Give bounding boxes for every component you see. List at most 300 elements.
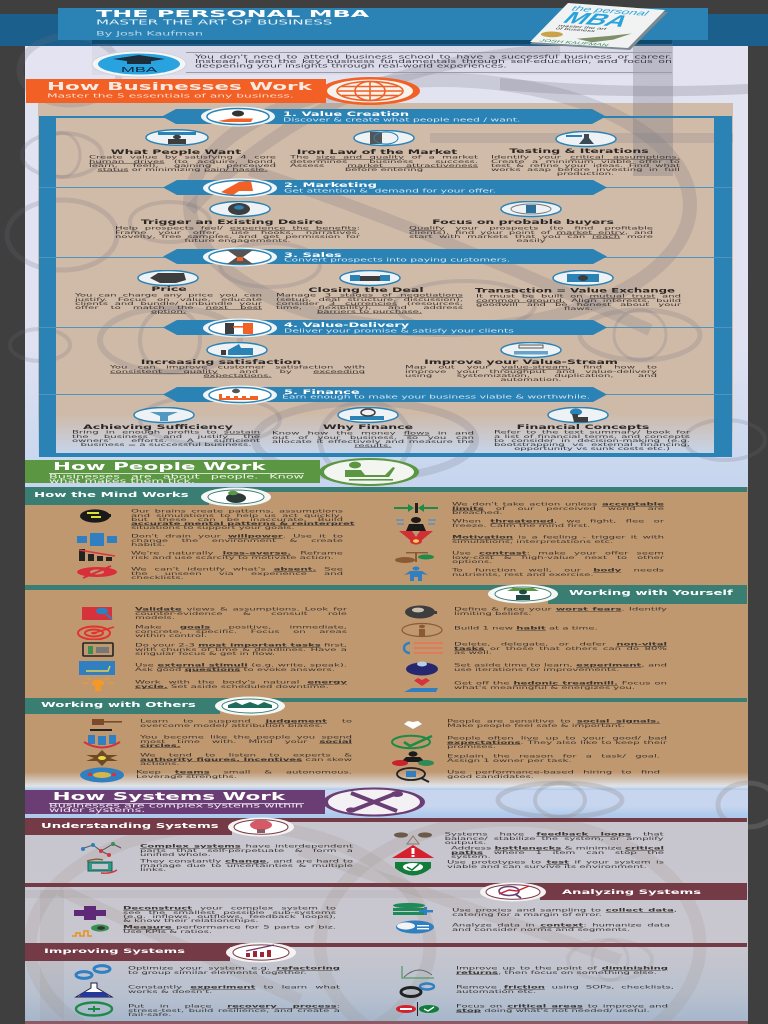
text: contrast: options. — [452, 559, 492, 564]
text: hiring: good candidates. — [447, 774, 534, 779]
text: experiment: Set aside time to learn, experiment, and — [454, 663, 667, 668]
icon: white heart — [391, 717, 435, 733]
intro text — [195, 54, 672, 69]
card: Iron Law of the Market: The size and quality of a market — [290, 155, 478, 160]
icon: person with tags — [391, 751, 435, 767]
card: Achieving Sufficiency: Bring in enough profits to sustain — [72, 430, 260, 435]
card: Increasing satisfaction: consistent quality and by exceeding — [110, 369, 365, 374]
ribbon: Sales — [163, 248, 607, 266]
text: absent: the unseen via experience and — [131, 571, 343, 576]
card: Testing & Iterations: Testing & Iterations — [509, 147, 649, 155]
heading banner: How Systems Work: How Systems Work — [53, 791, 285, 803]
text: feedback loops: balance/ stabilize the system, or amplify — [445, 836, 664, 841]
text: hedonic treadmill: what's meaningful & energizes you. — [454, 685, 635, 690]
text: measure — [123, 926, 336, 934]
card: Why Finance: allocate it effectively and measure the — [272, 439, 474, 444]
text: contrast — [452, 552, 664, 564]
icon: navy pig — [400, 660, 444, 676]
card: Testing & Iterations: works asap before investing in full — [491, 167, 680, 172]
panel: Working with Yourself — [25, 585, 748, 698]
card: Focus on probable buyers: Qualify your prospects (to find profitable — [409, 226, 653, 231]
card: Achieving Sufficiency: business = a successful business. — [81, 442, 251, 447]
icon: book cover: master the art — [557, 24, 608, 31]
card: Achieving Sufficiency: Achieving Sufficiency — [83, 423, 233, 430]
card: Achieving Sufficiency: owners' efforts. A sufficient — [72, 438, 260, 443]
card: Focus on probable buyers: easily — [516, 238, 546, 243]
watermark: systems — [25, 818, 748, 1024]
text: test: Use prototypes to test if your system is — [447, 860, 664, 865]
icon: network — [79, 841, 123, 857]
card: Achieving Sufficiency — [72, 407, 260, 447]
text: non-vital tasks: tasks or those that others can do 80% — [454, 646, 667, 651]
text: non-vital tasks: Delete, delegate, or defer non-vital — [454, 642, 667, 647]
icon: delete list — [400, 640, 444, 656]
text: experiment: use iterations for improvements. — [454, 667, 619, 672]
card: Transaction = Value Exchange — [475, 270, 681, 311]
panel: Improving Systems — [25, 943, 748, 1024]
card: Why Finance: results. — [354, 443, 392, 448]
text: brains: situations to support your goals. — [131, 525, 295, 530]
text: recovery process: fail-safe. — [128, 1012, 171, 1017]
intro rule lines — [186, 52, 672, 73]
text: goals: within control. — [135, 633, 207, 638]
ribbon: Value Creation: Discover & create what people need / want. — [283, 117, 520, 123]
text: deconstruct: see the smallest possible sub-systems — [123, 910, 336, 915]
card: Trigger an Existing Desire: novelty, free samples, and get permission for — [115, 234, 360, 239]
text: judgement: overcome model/ attribution biases. — [140, 723, 323, 728]
icon: dark head — [400, 604, 444, 620]
icon: blue bubble — [391, 920, 435, 936]
heading banner: How People Work: what makes them tick. — [49, 477, 195, 484]
icon: globe — [326, 77, 420, 105]
text: social signals: Make people feel safe & important. — [447, 723, 625, 728]
card: Financial Concepts: Financial Concepts — [517, 423, 649, 430]
card: Price: You can charge any price you can — [75, 293, 262, 298]
card: What People Want: learn, feel), gaining perceived — [89, 163, 276, 168]
heading banner: How Businesses Work: Master the 5 essentials of any business. — [47, 93, 294, 99]
card: Transaction = Value Exchange: common ground. Align interests, build — [476, 298, 681, 303]
ribbon: Value-Delivery: 4. Value-Delivery — [284, 322, 409, 329]
card: Trigger an Existing Desire: Frame your offer, use hooks, narratives, — [115, 230, 360, 235]
card: Financial Concepts: bootstrapping vs external financing, — [494, 442, 690, 447]
icon: change cycle — [79, 858, 123, 874]
card: Focus on probable buyers — [409, 201, 653, 243]
header panel — [58, 8, 708, 44]
card: Financial Concepts: Refer to the text summary/ book for — [494, 430, 690, 435]
heading banner: How People Work — [25, 458, 419, 486]
card: Price: offer to match the next best — [75, 305, 262, 310]
heading banner: How Businesses Work — [26, 77, 420, 105]
card: What People Want: Create value by satisfying 4 core — [89, 155, 276, 160]
icon: medal — [394, 530, 438, 546]
text: friction: Remove friction using SOPs, checklists, — [456, 985, 674, 990]
heading: Working with Others: Working with Others — [41, 701, 196, 709]
text: friction: automation etc. — [456, 989, 536, 994]
icon: orange bulb — [76, 676, 120, 692]
ribbon: Value Creation — [163, 106, 605, 126]
card: Testing & Iterations: Create a minimum viable offer to — [491, 159, 680, 164]
text: complex systems: parts that self-perpetuate & form a — [140, 848, 353, 853]
card: Financial Concepts: opportunity vs sunk costs etc.) — [514, 446, 670, 451]
card: Closing the Deal: barriers to purchase. — [317, 309, 422, 314]
heading banner: How People Work: Businesses are about people. Know — [49, 473, 304, 480]
text: motivation: Motivation is a feeling - trigger it with — [452, 535, 664, 540]
heading banner: How Systems Work — [25, 787, 425, 817]
ribbon: Value-Delivery — [163, 318, 607, 338]
card: Testing & Iterations — [491, 131, 680, 176]
text: absent: checklists. — [131, 575, 184, 580]
icon: people circle — [80, 733, 124, 749]
icon: book cover: JOSH KAUFMAN — [538, 38, 610, 47]
card: Improve your Value-Stream: Map out your value-stream, find how to — [405, 365, 657, 370]
author: By Josh Kaufman — [96, 30, 203, 37]
icon: head — [80, 509, 111, 523]
text: brains: but these can be inaccurate. Build — [131, 517, 343, 522]
ribbon: Marketing: 2. Marketing — [284, 182, 377, 189]
text: important tasks: singular focus & get in flow. — [135, 651, 275, 656]
card: Closing the Deal: consider 3 currencies (resources, — [276, 301, 463, 306]
card: Trigger an Existing Desire: future engagements. — [184, 238, 291, 243]
text: absent — [131, 567, 343, 580]
card: Improve your Value-Stream: automation. — [500, 377, 562, 382]
text: brains: and simulations to help us act quickly, — [131, 513, 343, 518]
intro text: deepening your insights through real-world experiences. — [195, 63, 507, 69]
card: Increasing satisfaction: You can improve customer satisfaction with — [110, 365, 365, 370]
text: non-vital tasks — [454, 643, 667, 655]
text: limits — [452, 502, 664, 515]
text: energy cycle — [135, 681, 347, 689]
text: willpower: habits. — [131, 542, 165, 547]
text: judgement — [140, 720, 352, 728]
panel: How the Mind Works — [25, 487, 748, 585]
card: Focus on probable buyers: start with markets that you can reach more — [409, 234, 653, 239]
text: refactoring: Optimize your system e.g. refactoring — [128, 966, 340, 971]
text: body: To function well, our body needs — [452, 568, 664, 573]
ribbon: Finance — [163, 386, 607, 404]
text: experiment: Constantly experiment to learn what — [128, 985, 340, 990]
text: context — [452, 924, 670, 932]
text: diminishing returns: returns, then focus on something else. — [456, 970, 657, 975]
text: complex systems: unified whole. — [140, 852, 211, 857]
text: absent: We can't identify what's absent. See — [131, 567, 343, 572]
card: Price: option. — [151, 309, 186, 314]
card: Achieving Sufficiency: the business and justify the — [72, 434, 260, 439]
text: worst fears — [454, 608, 667, 616]
heading banner: How Systems Work: Businesses are complex systems within — [49, 803, 303, 810]
icon: book cover: MBA — [558, 8, 636, 30]
text: authority figures: We tend to listen to experts & — [140, 753, 352, 758]
text: limits: limits of our perceived world are — [452, 506, 664, 511]
text: important tasks: with chunks of time & deadlines. Have a — [135, 647, 347, 652]
text: change: They constantly change, and are hard to — [140, 859, 353, 864]
text: hiring — [447, 771, 660, 779]
intro text: Instead, learn the key business fundamentals through self-education, and focus on — [195, 59, 672, 65]
text: critical areas: Focus on critical areas to improve and — [456, 1004, 668, 1009]
text: willpower — [131, 534, 343, 547]
icon: clipboard — [76, 641, 120, 657]
card: Iron Law of the Market — [290, 130, 478, 172]
text: teams — [136, 771, 352, 779]
text: critical areas — [456, 1005, 668, 1013]
card: Testing & Iterations: test & refine your ideas. Find what — [491, 163, 680, 168]
icon: target — [76, 624, 120, 640]
text: expectations: People often live up to your good/ bad — [447, 736, 667, 741]
text: threatened: freeze. Calm the mind first. — [452, 523, 590, 528]
card: Focus on probable buyers: Focus on probable buyers — [432, 218, 614, 226]
text: deconstruct: Deconstruct your complex system to — [123, 906, 336, 911]
card: Improve your Value-Stream: improve your throughput and value-delivery — [405, 369, 657, 374]
text: change: manage due to uncertainties & multiple — [140, 863, 353, 868]
icon: balance — [391, 830, 435, 846]
text: worst fears: Define & face your worst fears. Identify — [454, 607, 667, 612]
text: important tasks — [135, 644, 347, 656]
text: judgement: Learn to suspend judgement to — [140, 719, 352, 724]
text: motivation: simulations, interpretations etc. — [452, 539, 613, 544]
card: Transaction = Value Exchange: flaws. — [564, 306, 593, 311]
icon: folder and magnifier — [76, 605, 120, 621]
ribbon: Sales: 3. Sales — [284, 251, 342, 258]
card: Trigger an Existing Desire — [115, 201, 360, 243]
icon: magnifier person — [391, 767, 435, 783]
icon: green check — [391, 734, 435, 750]
text: measure: Measure performance for 5 parts of biz. — [123, 925, 336, 930]
icon: sheriff star — [80, 750, 124, 766]
text: diminishing returns: Improve up to the point of diminishing — [456, 966, 668, 971]
ribbon: Sales: Convert prospects into paying customers. — [284, 257, 510, 263]
card: Why Finance: out of your business, so you can — [272, 435, 474, 440]
text: reason: Assign 1 owner per task. — [447, 758, 572, 763]
text: diminishing returns — [456, 967, 668, 975]
text: goals: Make goals positive, immediate, — [135, 625, 347, 630]
text: important tasks: Do your 2-3 most important tasks first, — [135, 643, 347, 648]
icon: green shield — [391, 860, 435, 876]
text: expectations: expectations. They also like to keep their — [447, 740, 667, 745]
text: validate: models. — [135, 615, 175, 620]
text: goals: concrete, specific. Focus on areas — [135, 629, 347, 634]
text: teams: Leverage strengths. — [136, 774, 237, 779]
card: Closing the Deal — [276, 270, 463, 314]
text: feedback loops — [445, 833, 664, 845]
icon: heart in hand — [400, 677, 444, 693]
text: authority figures — [140, 754, 352, 766]
card: Increasing satisfaction: expectations. — [203, 373, 272, 378]
text: willpower: Don't drain your willpower. Use it to — [131, 534, 343, 539]
text: expectations: promises. — [447, 744, 496, 749]
card: Transaction = Value Exchange: Transaction = Value Exchange — [475, 287, 675, 294]
heading: Analyzing Systems: Analyzing Systems — [562, 888, 701, 896]
text: deconstruct: (e.g. inflows, outflows, feedback loops), — [123, 914, 336, 919]
card: Transaction = Value Exchange: goodwill and be honest about your — [476, 302, 681, 307]
text: bottlenecks: Address bottlenecks & minimize critical — [451, 846, 664, 851]
card: What People Want: What People Want — [111, 148, 241, 155]
text: willpower: change the environment & create — [131, 538, 343, 543]
text: collect data — [452, 909, 677, 917]
text: experiment — [128, 986, 340, 994]
text: contrast: Use contrast: make your offer seem — [452, 551, 664, 556]
icon: team ellipse — [80, 767, 124, 783]
text: change: links. — [140, 867, 166, 872]
text: motivation — [452, 536, 664, 544]
icon: book cover: the personal — [569, 4, 652, 17]
ribbon: Value-Delivery: Deliver your promise & satisfy your clients — [284, 328, 514, 334]
text: context: and consider norms and segments. — [452, 927, 630, 932]
heading: Working with Yourself: Working with Yourself — [569, 590, 733, 597]
text: test: viable and can survive its environment. — [447, 864, 647, 869]
card: Why Finance: Know how the money flows in and — [272, 431, 474, 436]
text: change — [140, 860, 353, 872]
text: refactoring — [128, 967, 340, 975]
panel: Analyzing Systems — [25, 883, 748, 943]
card: Closing the Deal: Closing the Deal — [308, 286, 424, 294]
text: experiment: works & doesn't. — [128, 989, 212, 994]
text: social circles — [140, 736, 352, 748]
heading banner: How Businesses Work: How Businesses Work — [47, 81, 312, 93]
watermark globes: lower — [0, 780, 768, 1024]
icon: MBA cap badge: MBA — [121, 67, 158, 74]
text: bottlenecks: paths where 1 item can stop the — [451, 850, 664, 855]
heading: Improving Systems: Improving Systems — [44, 948, 185, 955]
card: Focus on probable buyers: clients), find your point of market entry, and — [409, 230, 653, 235]
card: Testing & Iterations: production. — [557, 171, 614, 176]
text: contrast: low-cost & high-value next to other — [452, 555, 664, 560]
heading: How the Mind Works: How the Mind Works — [34, 492, 189, 499]
card: Iron Law of the Market: determines business success. — [290, 159, 478, 164]
card: Transaction = Value Exchange: It must be built on mutual trust and — [476, 294, 681, 299]
text: recovery process — [128, 1005, 340, 1017]
ribbon: Finance: Earn enough to make your business viable & worthwhile. — [282, 394, 590, 400]
text: worst fears: limiting beliefs. — [454, 611, 531, 616]
icon: warning triangle — [391, 844, 435, 860]
card: Increasing satisfaction: Increasing satisfaction — [141, 358, 301, 366]
panel: systems backdrop — [25, 818, 748, 1024]
intro text: You don't need to attend business school to have a successful business or career. — [195, 54, 672, 60]
card: What People Want: human drives (to acquire, bond, — [89, 159, 276, 164]
text: validate: Validate views & assumptions. Look for — [135, 607, 347, 612]
ribbon: Finance: 5. Finance — [284, 389, 360, 396]
icon: diminishing curve — [396, 964, 440, 980]
text: hedonic treadmill — [454, 682, 667, 690]
text: recovery process: Put in place recovery process: — [128, 1004, 340, 1009]
card: Why Finance — [272, 407, 474, 448]
text: complex systems: Complex systems have interdependent — [140, 844, 353, 849]
icon: blue body — [394, 566, 438, 582]
card: Improve your Value-Stream — [405, 342, 657, 382]
text: context: Analyze data in context: humanize data — [452, 923, 670, 928]
text: test — [447, 861, 664, 869]
icon: flask — [72, 982, 116, 998]
icon: crossed tools — [323, 787, 425, 817]
text: collect data: Use proxies and sampling to collect data, — [452, 908, 677, 913]
text: deconstruct — [123, 907, 336, 923]
text: external stimuli: Ask good questions to evoke answers. — [135, 667, 335, 672]
text: energy cycle: cycle. Set aside scheduled downtime. — [135, 684, 329, 689]
text: validate: counter-evidence & consult role — [135, 611, 347, 616]
text: body — [452, 569, 664, 577]
blue frame — [39, 116, 732, 457]
text: teams: Keep teams small & autonomous. — [136, 770, 352, 775]
panel: Working with Others — [25, 698, 748, 790]
ribbon: Marketing — [163, 178, 607, 198]
text: energy cycle: Work with the body's natural energy — [135, 680, 347, 685]
card: Improve your Value-Stream: Improve your Value-Stream — [424, 358, 618, 366]
card: Iron Law of the Market: Assess market attractiveness — [290, 163, 478, 168]
text: brains: accurate mental patterns & reinterpret — [131, 521, 355, 526]
icon: gears — [396, 982, 440, 998]
text: hiring: Use performance-based hiring to find — [447, 770, 660, 775]
text: hedonic treadmill: Get off the hedonic treadmill. Focus on — [454, 681, 667, 686]
watermark globes: top — [4, 34, 767, 480]
icon: stop and go — [396, 1001, 440, 1017]
text: critical areas: stop doing what's not needed/ useful. — [456, 1008, 650, 1013]
icon: scale — [394, 549, 438, 565]
text: collect data: catering for a margin of error. — [452, 912, 602, 917]
ribbon: Marketing: Get attention & demand for your offer. — [284, 188, 496, 194]
section panel: tan backdrop — [38, 103, 733, 455]
text: limits: breached. — [452, 510, 503, 515]
text: brains: Our brains create patterns, assumptions — [131, 509, 343, 514]
text: external stimuli: Use external stimuli (e.g. write, speak). — [135, 663, 347, 668]
card: Why Finance: Why Finance — [323, 423, 413, 430]
text: social circles: most time with. Mind your social — [140, 739, 352, 744]
icon: book cover — [530, 3, 668, 50]
text: measure: Use KPIs & ratios. — [123, 929, 212, 934]
text: social circles: You become like the people you spend — [140, 735, 352, 740]
heading banner: How Systems Work: wider systems. — [49, 807, 145, 814]
text: bottlenecks — [451, 847, 664, 859]
panel: Understanding Systems — [25, 818, 748, 883]
text: social signals — [447, 720, 660, 728]
icon: falling chart — [78, 549, 116, 561]
card: Trigger an Existing Desire: Trigger an Existing Desire — [141, 218, 323, 226]
card: Iron Law of the Market: Iron Law of the Market — [297, 148, 457, 155]
text: complex systems — [140, 845, 353, 857]
text: friction — [456, 986, 674, 994]
text: external stimuli — [135, 664, 347, 672]
card: Financial Concepts — [494, 407, 690, 451]
icon: blue board — [76, 660, 120, 676]
text: validate — [135, 608, 347, 620]
icon: gavel — [80, 716, 124, 732]
text: experiment — [454, 664, 667, 672]
text: refactoring: to group similar elements together. — [128, 970, 307, 975]
heading banner: How People Work: How People Work — [53, 461, 266, 473]
text: body: nutrients, rest and exercise. — [452, 572, 594, 577]
card: Closing the Deal: Manage 3 stages of negotiations — [276, 293, 463, 298]
text: deconstruct: & know their relationships. — [123, 918, 258, 923]
intro shaded block — [92, 43, 672, 75]
icon: person at laptop — [320, 458, 419, 486]
card: What People Want: status or minimizing pain/ hassle. — [97, 167, 268, 172]
text: goals — [135, 626, 347, 638]
icon: blue towers — [77, 533, 117, 546]
icon: measure — [70, 922, 114, 938]
text: reason — [447, 755, 660, 763]
icon: green arrows — [394, 503, 438, 513]
text: social circles: circles. — [140, 743, 181, 748]
text: recovery process: stress-test, build resilience, and create a — [128, 1008, 340, 1013]
icon: recovery circle — [72, 1001, 116, 1017]
header band — [0, 14, 768, 46]
card: Iron Law of the Market: before entering — [345, 167, 423, 172]
card: Trigger an Existing Desire: Help prospects feel/ experience the benefits: — [115, 226, 360, 231]
icon: threatened person — [396, 517, 436, 531]
card: Increasing satisfaction — [110, 342, 365, 378]
text: reason: Explain the reason for a task/ goal. — [447, 754, 660, 759]
icon: database — [391, 902, 435, 918]
card: Testing & Iterations: Identify your critical assumptions. — [491, 155, 680, 160]
text: expectations — [447, 737, 667, 749]
text: threatened — [452, 519, 664, 528]
